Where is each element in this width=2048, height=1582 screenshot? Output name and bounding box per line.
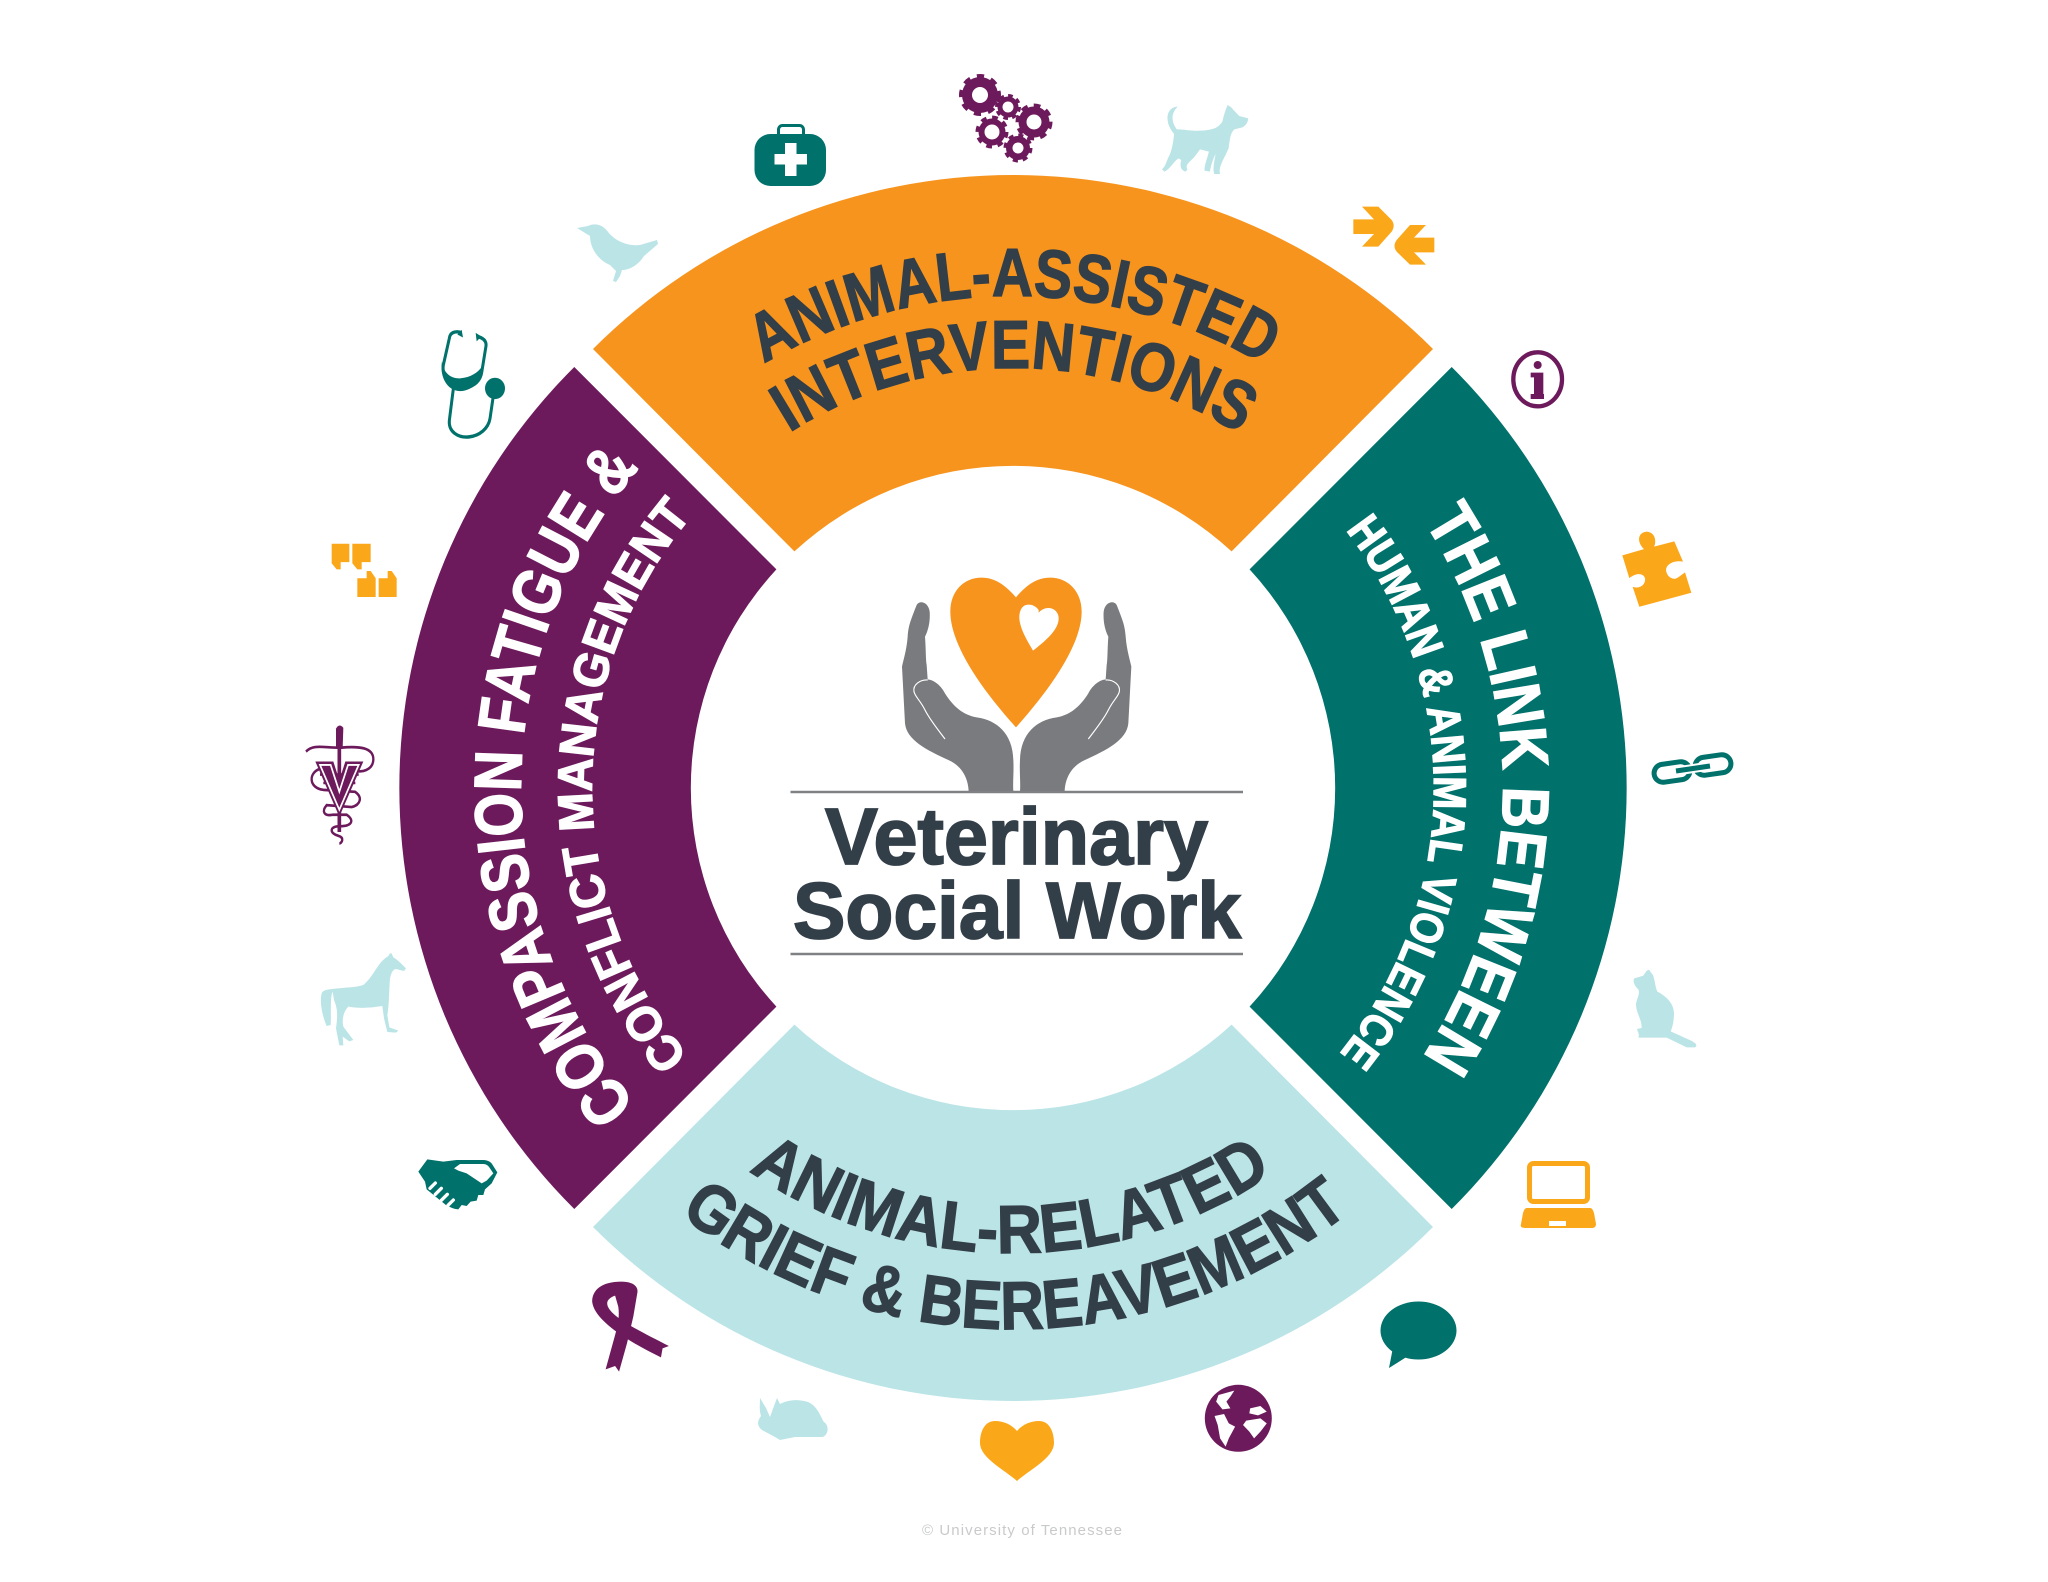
icon: rabbit xyxy=(758,1398,828,1440)
heading: compassion fatigue and conflict management: COMPASSION FATIGUE & xyxy=(474,450,638,1124)
panel: compassion fatigue and conflict management xyxy=(399,367,776,1209)
icon: horse xyxy=(321,953,406,1045)
icon: first aid kit xyxy=(754,126,826,186)
heading: compassion fatigue and conflict management: CONFLICT MANAGEMENT xyxy=(557,494,686,1071)
icon: information xyxy=(1513,352,1562,406)
icon: hands holding heart xyxy=(902,578,1131,792)
icon: bird xyxy=(577,224,658,282)
icon: laptop xyxy=(1521,1164,1596,1228)
logo text: veterinary: Veterinary xyxy=(825,792,1208,881)
icon: veterinary caduceus xyxy=(306,726,373,843)
panel: the link between human and animal violence xyxy=(1250,367,1627,1209)
icon: chain link xyxy=(1653,754,1732,783)
icon: handshake xyxy=(418,1159,497,1209)
icon: gears xyxy=(962,76,1050,160)
heading: animal-assisted interventions: ANIMAL-ASSISTED xyxy=(755,248,1278,364)
icon: dog xyxy=(1162,105,1248,174)
heading: animal-related grief and bereavement: GRIEF & BEREAVEMENT xyxy=(688,1174,1340,1330)
footer: copyright: © University of Tennessee xyxy=(922,1522,1122,1539)
logo text: social work: Social Work xyxy=(793,866,1241,955)
heading: animal-related grief and bereavement: ANIMAL-RELATED xyxy=(749,1140,1264,1254)
icon: awareness ribbon xyxy=(592,1282,669,1372)
center logo: veterinary social work xyxy=(790,578,1243,955)
heading: the link between human and animal violence xyxy=(1340,497,1550,1078)
panel: animal-related grief and bereavement xyxy=(593,1024,1433,1401)
icon: stethoscope xyxy=(442,330,505,437)
icon: globe xyxy=(1205,1385,1272,1452)
icon: opposing arrows xyxy=(1353,207,1434,265)
icon: heart xyxy=(980,1421,1054,1481)
icon: cat xyxy=(1634,970,1696,1047)
icon: quotation marks xyxy=(332,544,397,597)
heading: animal-assisted interventions xyxy=(755,248,1278,432)
icon: puzzle piece xyxy=(1622,532,1691,607)
panel: animal-assisted interventions xyxy=(593,175,1433,552)
heading: the link between human and animal violence: HUMAN & ANIMAL VIOLENCE xyxy=(1340,512,1466,1072)
icon: speech bubble xyxy=(1380,1302,1456,1368)
heading: animal-assisted interventions: INTERVENTIONS xyxy=(768,320,1256,432)
heading: the link between human and animal violence: THE LINK BETWEEN xyxy=(1424,497,1550,1078)
